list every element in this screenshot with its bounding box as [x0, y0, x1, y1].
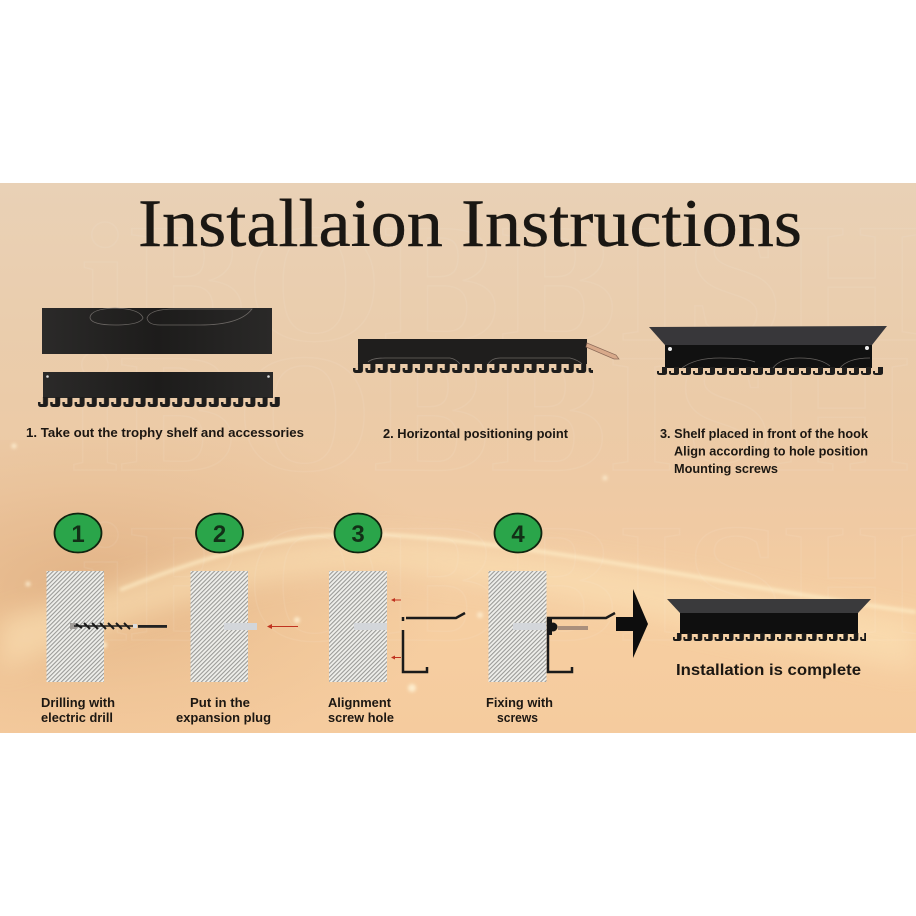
- red arrows: [391, 598, 401, 660]
- diagram 1: drilling: [41, 571, 167, 725]
- diagram 3: alignment: [328, 571, 465, 725]
- caption: Put in the: [190, 696, 250, 710]
- hook profile: [403, 613, 465, 672]
- diagram 2: expansion plug: [176, 571, 298, 725]
- arrow: to result: [616, 589, 648, 658]
- wall: [46, 571, 104, 682]
- watermark: iBOBBISH: [80, 489, 916, 677]
- wall: [329, 571, 387, 682]
- caption: screws: [497, 711, 538, 725]
- wall: [488, 571, 546, 682]
- watermark: iBOBBISH: [80, 189, 916, 377]
- hook plate: [37, 372, 280, 408]
- caption: [486, 696, 553, 725]
- caption: electric drill: [41, 711, 113, 725]
- step badge 1: 1: [71, 521, 85, 548]
- shelf board: [42, 308, 272, 354]
- plug: [354, 623, 387, 630]
- step badge 3: 3: [351, 521, 365, 548]
- caption: [176, 696, 271, 725]
- panel: background band: [0, 183, 916, 733]
- hook plate: [352, 339, 593, 374]
- step badge 2: [196, 514, 243, 552]
- watermark: iBOBBISH: [70, 319, 910, 507]
- title: Installaion Instructions: [138, 185, 802, 261]
- panel: step 1 trophy shelf and accessories: [26, 308, 304, 440]
- panel: step 2 horizontal positioning: [352, 339, 619, 441]
- finished shelf: [667, 599, 871, 642]
- caption: Alignment: [328, 696, 392, 710]
- drill bit: [70, 623, 167, 629]
- step badge 2: 2: [213, 521, 226, 548]
- caption: expansion plug: [176, 711, 271, 725]
- plug: [224, 623, 257, 630]
- hook profile: [547, 613, 615, 672]
- plug: [513, 623, 546, 630]
- caption: [328, 696, 394, 725]
- caption: 3. Shelf placed in front of the hook: [660, 427, 868, 441]
- caption: 1. Take out the trophy shelf and accessories: [26, 426, 304, 440]
- caption: Align according to hole position: [674, 444, 868, 458]
- screw: [547, 619, 588, 635]
- diagram 4: fixing: [486, 571, 615, 725]
- caption: Fixing with: [486, 696, 553, 710]
- step badge 4: [494, 514, 542, 552]
- step badge 4: 4: [511, 521, 525, 548]
- caption: [41, 696, 115, 725]
- step badge 3: [334, 514, 382, 552]
- step badge 1: [54, 514, 102, 552]
- panel: step 3 shelf in front of hook: [649, 326, 887, 476]
- caption: Mounting screws: [674, 462, 778, 476]
- watermark: [70, 189, 916, 677]
- caption: screw hole: [328, 711, 394, 725]
- red arrow: [267, 624, 298, 629]
- pencil: [586, 343, 619, 359]
- shelf with hooks: [649, 326, 887, 376]
- caption: Installation is complete: [676, 662, 861, 679]
- caption: [660, 427, 868, 476]
- wall: [190, 571, 248, 682]
- panel: installation complete: [667, 599, 871, 679]
- caption: Drilling with: [41, 696, 115, 710]
- caption: 2. Horizontal positioning point: [383, 427, 569, 441]
